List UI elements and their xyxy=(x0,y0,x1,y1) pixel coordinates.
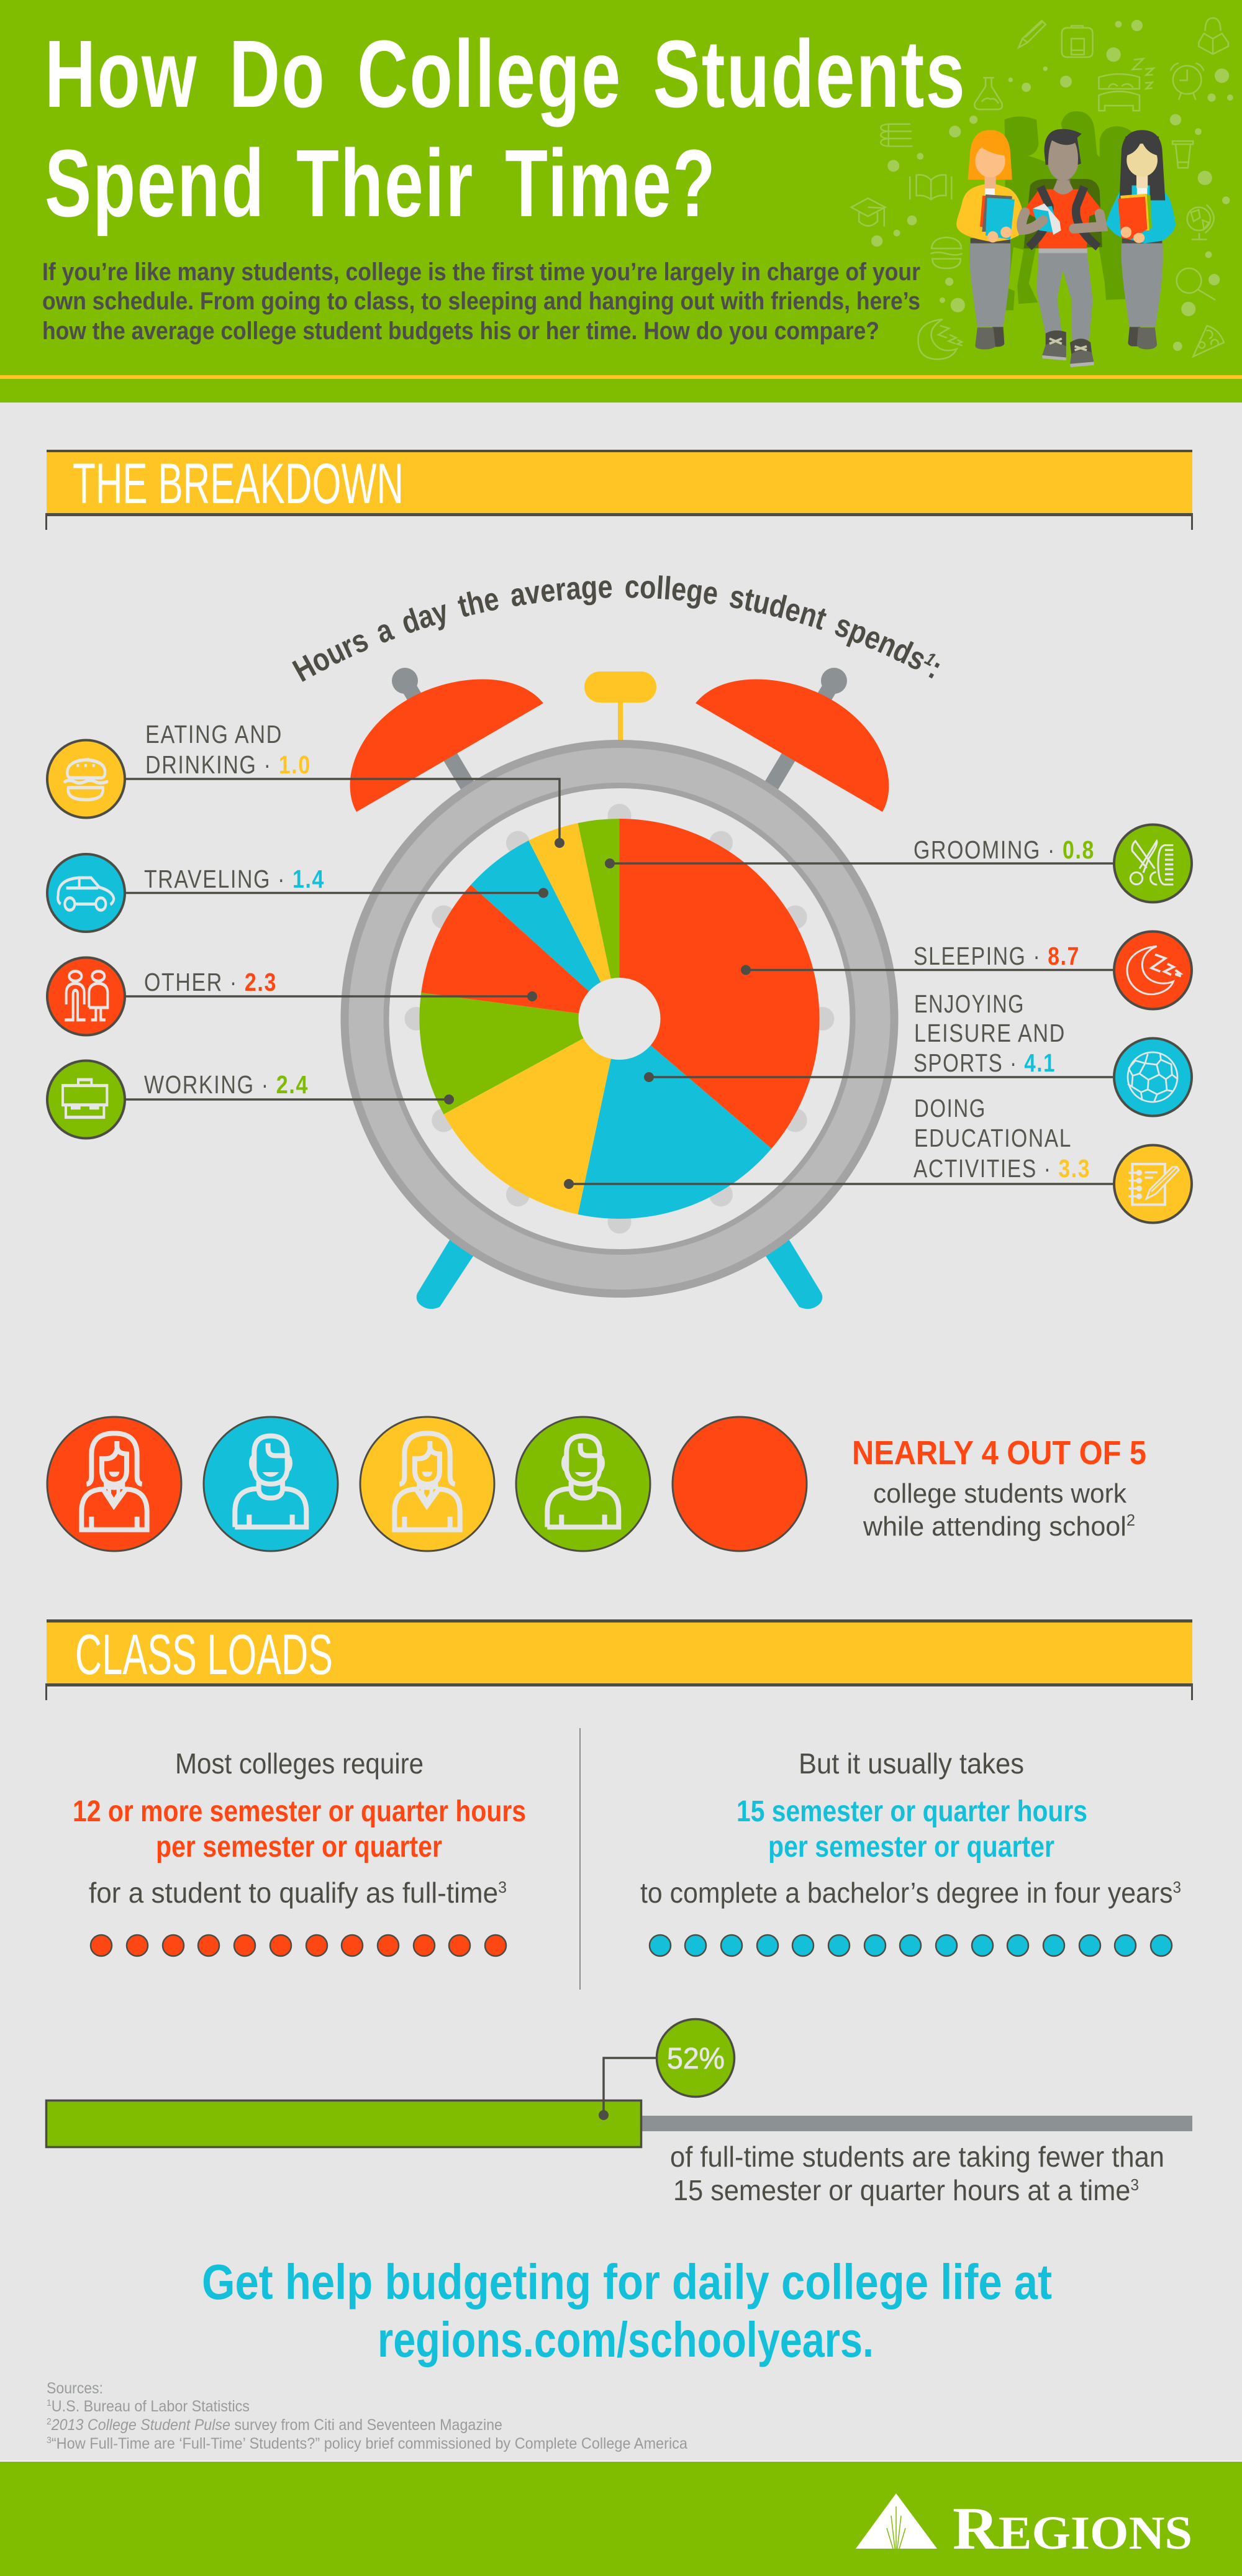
label: leisure and sports: LEISURE AND xyxy=(914,1019,1066,1047)
intro paragraph: how the average college student budgets his or her time. How do you compare? xyxy=(42,317,879,345)
student: boy with backpack xyxy=(1022,129,1103,367)
sources: 2 xyxy=(47,2416,52,2427)
icon: man green xyxy=(516,1417,650,1551)
sources: 2013 College Student Pulse xyxy=(51,2416,230,2434)
background doodle icons xyxy=(851,18,1233,359)
icon: soccer ball xyxy=(1114,1039,1192,1116)
label: grooming: GROOMING · 0.8 xyxy=(913,835,1095,864)
section heading: class loads xyxy=(45,1619,1193,1700)
footer band xyxy=(0,2460,1242,2576)
label: other: OTHER · 2.3 xyxy=(144,968,277,996)
callout: nearly 4 out of 5 xyxy=(852,1434,1146,1542)
label: leisure and sports: ENJOYING xyxy=(914,990,1025,1018)
text: full-time students statistic: 3 xyxy=(1130,2175,1139,2194)
bell stems xyxy=(392,668,847,789)
sources: “How Full-Time are ‘Full-Time’ Students?” policy brief commissioned by Complete College America xyxy=(52,2435,687,2452)
student silhouettes xyxy=(1003,111,1133,310)
label: leisure and sports xyxy=(913,990,1066,1077)
label: educational activities xyxy=(913,1094,1090,1183)
call to action: regions.com/schoolyears. xyxy=(378,2312,874,2367)
label: sleeping: SLEEPING · 8.7 xyxy=(913,942,1080,970)
label: eating and drinking: DRINKING · 1.0 xyxy=(145,750,311,779)
panel: full-time requirement: 3 xyxy=(498,1878,507,1896)
clock ring xyxy=(340,740,898,1298)
icon: burger xyxy=(47,740,125,817)
icon: moon and Zs xyxy=(1114,932,1192,1009)
progress bar: 52 percent: 52% xyxy=(667,2042,725,2075)
text: full-time students statistic: 15 semester or quarter hours at a time xyxy=(673,2174,1159,2206)
curved chart heading: 1 xyxy=(924,653,936,666)
leader lines xyxy=(125,779,1113,1189)
pie chart xyxy=(419,819,820,1219)
section heading: the breakdown xyxy=(45,450,1193,530)
panel: four-year requirement: per semester or quarter xyxy=(768,1831,1054,1864)
label: eating and drinking xyxy=(145,720,311,779)
panel: full-time requirement: Most colleges require xyxy=(175,1747,424,1780)
clock handle xyxy=(584,671,656,742)
label: working: WORKING · 2.4 xyxy=(144,1070,309,1099)
title: Spend Their Time? xyxy=(45,130,717,237)
sources: 1 xyxy=(47,2398,52,2408)
sources: survey from Citi and Seventeen Magazine xyxy=(235,2416,523,2434)
call to action: Get help budgeting for daily college life at xyxy=(202,2254,1052,2310)
icon: people xyxy=(47,958,125,1035)
clock bells xyxy=(350,679,889,812)
label: educational activities: ACTIVITIES · 3.3 xyxy=(913,1154,1090,1183)
panel: four-year requirement: But it usually takes xyxy=(799,1747,1024,1780)
icon: car xyxy=(47,854,125,932)
sources: Sources: xyxy=(47,2380,103,2397)
progress bar: 52 percent xyxy=(46,2019,1192,2147)
label: educational activities: EDUCATIONAL xyxy=(914,1124,1072,1152)
circle: blank red xyxy=(673,1417,807,1551)
panel: full-time requirement: per semester or quarter xyxy=(156,1831,442,1864)
panel: four-year requirement: to complete a bachelor’s degree in four years xyxy=(640,1877,1212,1909)
label: eating and drinking: EATING AND xyxy=(145,720,283,749)
icon: woman yellow xyxy=(360,1417,494,1551)
curved chart heading: : xyxy=(928,662,940,678)
student: orange hair xyxy=(956,130,1023,350)
intro paragraph: If you’re like many students, college is the first time you’re largely in charge of your xyxy=(42,258,920,286)
section heading: the breakdown: THE BREAKDOWN xyxy=(73,452,404,516)
icon: scissors and comb xyxy=(1114,825,1192,902)
header panel xyxy=(0,0,1242,403)
label: educational activities: DOING xyxy=(914,1094,986,1122)
label: leisure and sports: SPORTS · 4.1 xyxy=(913,1049,1056,1077)
panel: four-year requirement xyxy=(640,1747,1181,1956)
icon: briefcase xyxy=(47,1061,125,1138)
person icon row xyxy=(47,1417,807,1551)
sources: U.S. Bureau of Labor Statistics xyxy=(52,2398,250,2415)
regions logo xyxy=(856,2493,1192,2562)
icon: notepad xyxy=(1114,1145,1192,1222)
panel: four-year requirement: 3 xyxy=(1173,1878,1181,1896)
section heading: class loads: CLASS LOADS xyxy=(75,1623,333,1686)
clock feet xyxy=(417,1224,822,1309)
title xyxy=(45,20,966,237)
dots: 15 hours xyxy=(650,1935,1172,1956)
student: girl with black hair xyxy=(1106,130,1176,349)
callout: nearly 4 out of 5: while attending school xyxy=(863,1511,1132,1542)
panel: full-time requirement: 12 or more semester or quarter hours xyxy=(73,1795,526,1828)
call to action xyxy=(202,2254,1052,2367)
panel: four-year requirement: 15 semester or quarter hours xyxy=(737,1795,1087,1828)
intro paragraph: own schedule. From going to class, to sleeping and hanging out with friends, here’s xyxy=(42,288,920,315)
label: traveling: TRAVELING · 1.4 xyxy=(144,865,325,893)
curved chart heading: Hours a day the average college student spends xyxy=(292,575,924,682)
sources xyxy=(47,2380,687,2452)
text: full-time students statistic xyxy=(670,2141,1164,2206)
panel: full-time requirement: for a student to qualify as full-time xyxy=(89,1877,516,1909)
icon: woman red xyxy=(47,1417,181,1551)
icon: man cyan xyxy=(204,1417,338,1551)
callout: nearly 4 out of 5: 2 xyxy=(1126,1511,1135,1529)
panel: full-time requirement xyxy=(73,1747,526,1956)
callout: nearly 4 out of 5: college students work xyxy=(873,1478,1127,1509)
illustration: three students xyxy=(956,111,1176,367)
regions logo: REGIONS xyxy=(953,2495,1192,2562)
clock tick marks xyxy=(405,804,835,1234)
alarm clock chart xyxy=(340,668,898,1309)
intro paragraph xyxy=(42,258,920,345)
dots: 12 hours xyxy=(91,1935,506,1956)
callout: nearly 4 out of 5: NEARLY 4 OUT OF 5 xyxy=(852,1434,1146,1472)
text: full-time students statistic: of full-time students are taking fewer than xyxy=(670,2141,1164,2173)
sources: 3 xyxy=(47,2435,52,2446)
